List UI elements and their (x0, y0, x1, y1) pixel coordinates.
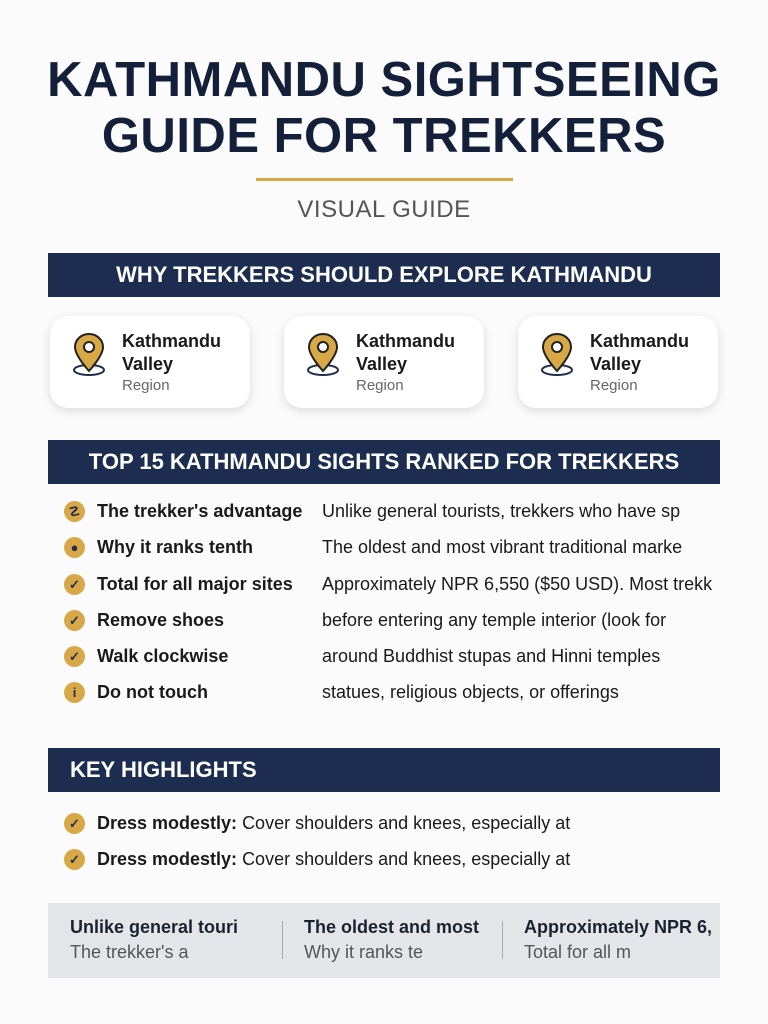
row 4: before entering any temple interior (look for (322, 610, 666, 630)
card 2: Region (356, 377, 404, 394)
title (47, 53, 721, 163)
card 3: Kathmandu (590, 331, 689, 351)
subtitle: VISUAL GUIDE (297, 196, 471, 223)
row 5: ✓ (69, 649, 80, 664)
card 3 (518, 316, 718, 408)
summary col 3: Approximately NPR 6, (524, 917, 712, 937)
gold divider (256, 178, 513, 181)
banner: key highlights (48, 748, 720, 792)
banner: top 15 (48, 440, 720, 484)
row 5 (64, 646, 660, 667)
card 1: Valley (122, 354, 173, 374)
row 6: Do not touch (97, 682, 208, 702)
row 4: Remove shoes (97, 610, 224, 630)
summary col 1: Unlike general touri (70, 917, 238, 937)
row 6: i (73, 685, 76, 700)
row 1: The trekker's advantage (97, 501, 302, 521)
title: KATHMANDU SIGHTSEEING (47, 53, 721, 107)
banner: why trekkers (48, 253, 720, 297)
card 2: Kathmandu (356, 331, 455, 351)
summary col 1: The trekker's a (70, 942, 188, 962)
summary col 1 (70, 917, 238, 962)
card 3: Valley (590, 354, 641, 374)
summary col 3 (524, 917, 712, 962)
row 1 (64, 501, 680, 522)
row 5: around Buddhist stupas and Hinni temples (322, 646, 660, 666)
card 2 (284, 316, 484, 408)
row 4: ✓ (69, 613, 80, 628)
card 1: Region (122, 377, 170, 394)
row 3: ✓ (69, 577, 80, 592)
highlight 2: Dress modestly: Cover shoulders and knees, especially at (97, 849, 570, 869)
highlight 1: ✓ (69, 816, 80, 831)
row 3 (64, 574, 712, 595)
card 2: Valley (356, 354, 407, 374)
row 6: statues, religious objects, or offerings (322, 682, 619, 702)
row 2 (64, 537, 682, 558)
banner: why trekkers: WHY TREKKERS SHOULD EXPLORE KATHMANDU (116, 262, 652, 287)
summary col 2 (304, 917, 479, 962)
highlight 1: Dress modestly: Cover shoulders and knees, especially at (97, 813, 570, 833)
card 3: Region (590, 377, 638, 394)
row 4 (64, 610, 666, 631)
highlight 2: ✓ (69, 852, 80, 867)
banner: top 15: TOP 15 KATHMANDU SIGHTS RANKED FOR TREKKERS (89, 449, 679, 474)
row 3: Approximately NPR 6,550 ($50 USD). Most trekk (322, 574, 712, 594)
row 2: ● (71, 540, 78, 555)
row 6 (64, 682, 619, 703)
summary col 3: Total for all m (524, 942, 631, 962)
banner: key highlights: KEY HIGHLIGHTS (70, 757, 257, 782)
summary bar (48, 903, 720, 978)
row 2: The oldest and most vibrant traditional marke (322, 537, 682, 557)
card 1 (50, 316, 250, 408)
row 3: Total for all major sites (97, 574, 293, 594)
row 2: Why it ranks tenth (97, 537, 253, 557)
row 5: Walk clockwise (97, 646, 228, 666)
summary col 2: The oldest and most (304, 917, 479, 937)
title: GUIDE FOR TREKKERS (102, 109, 666, 163)
card 1: Kathmandu (122, 331, 221, 351)
row 1: Unlike general tourists, trekkers who have sp (322, 501, 680, 521)
row 1: ☡ (69, 504, 80, 519)
summary col 2: Why it ranks te (304, 942, 423, 962)
